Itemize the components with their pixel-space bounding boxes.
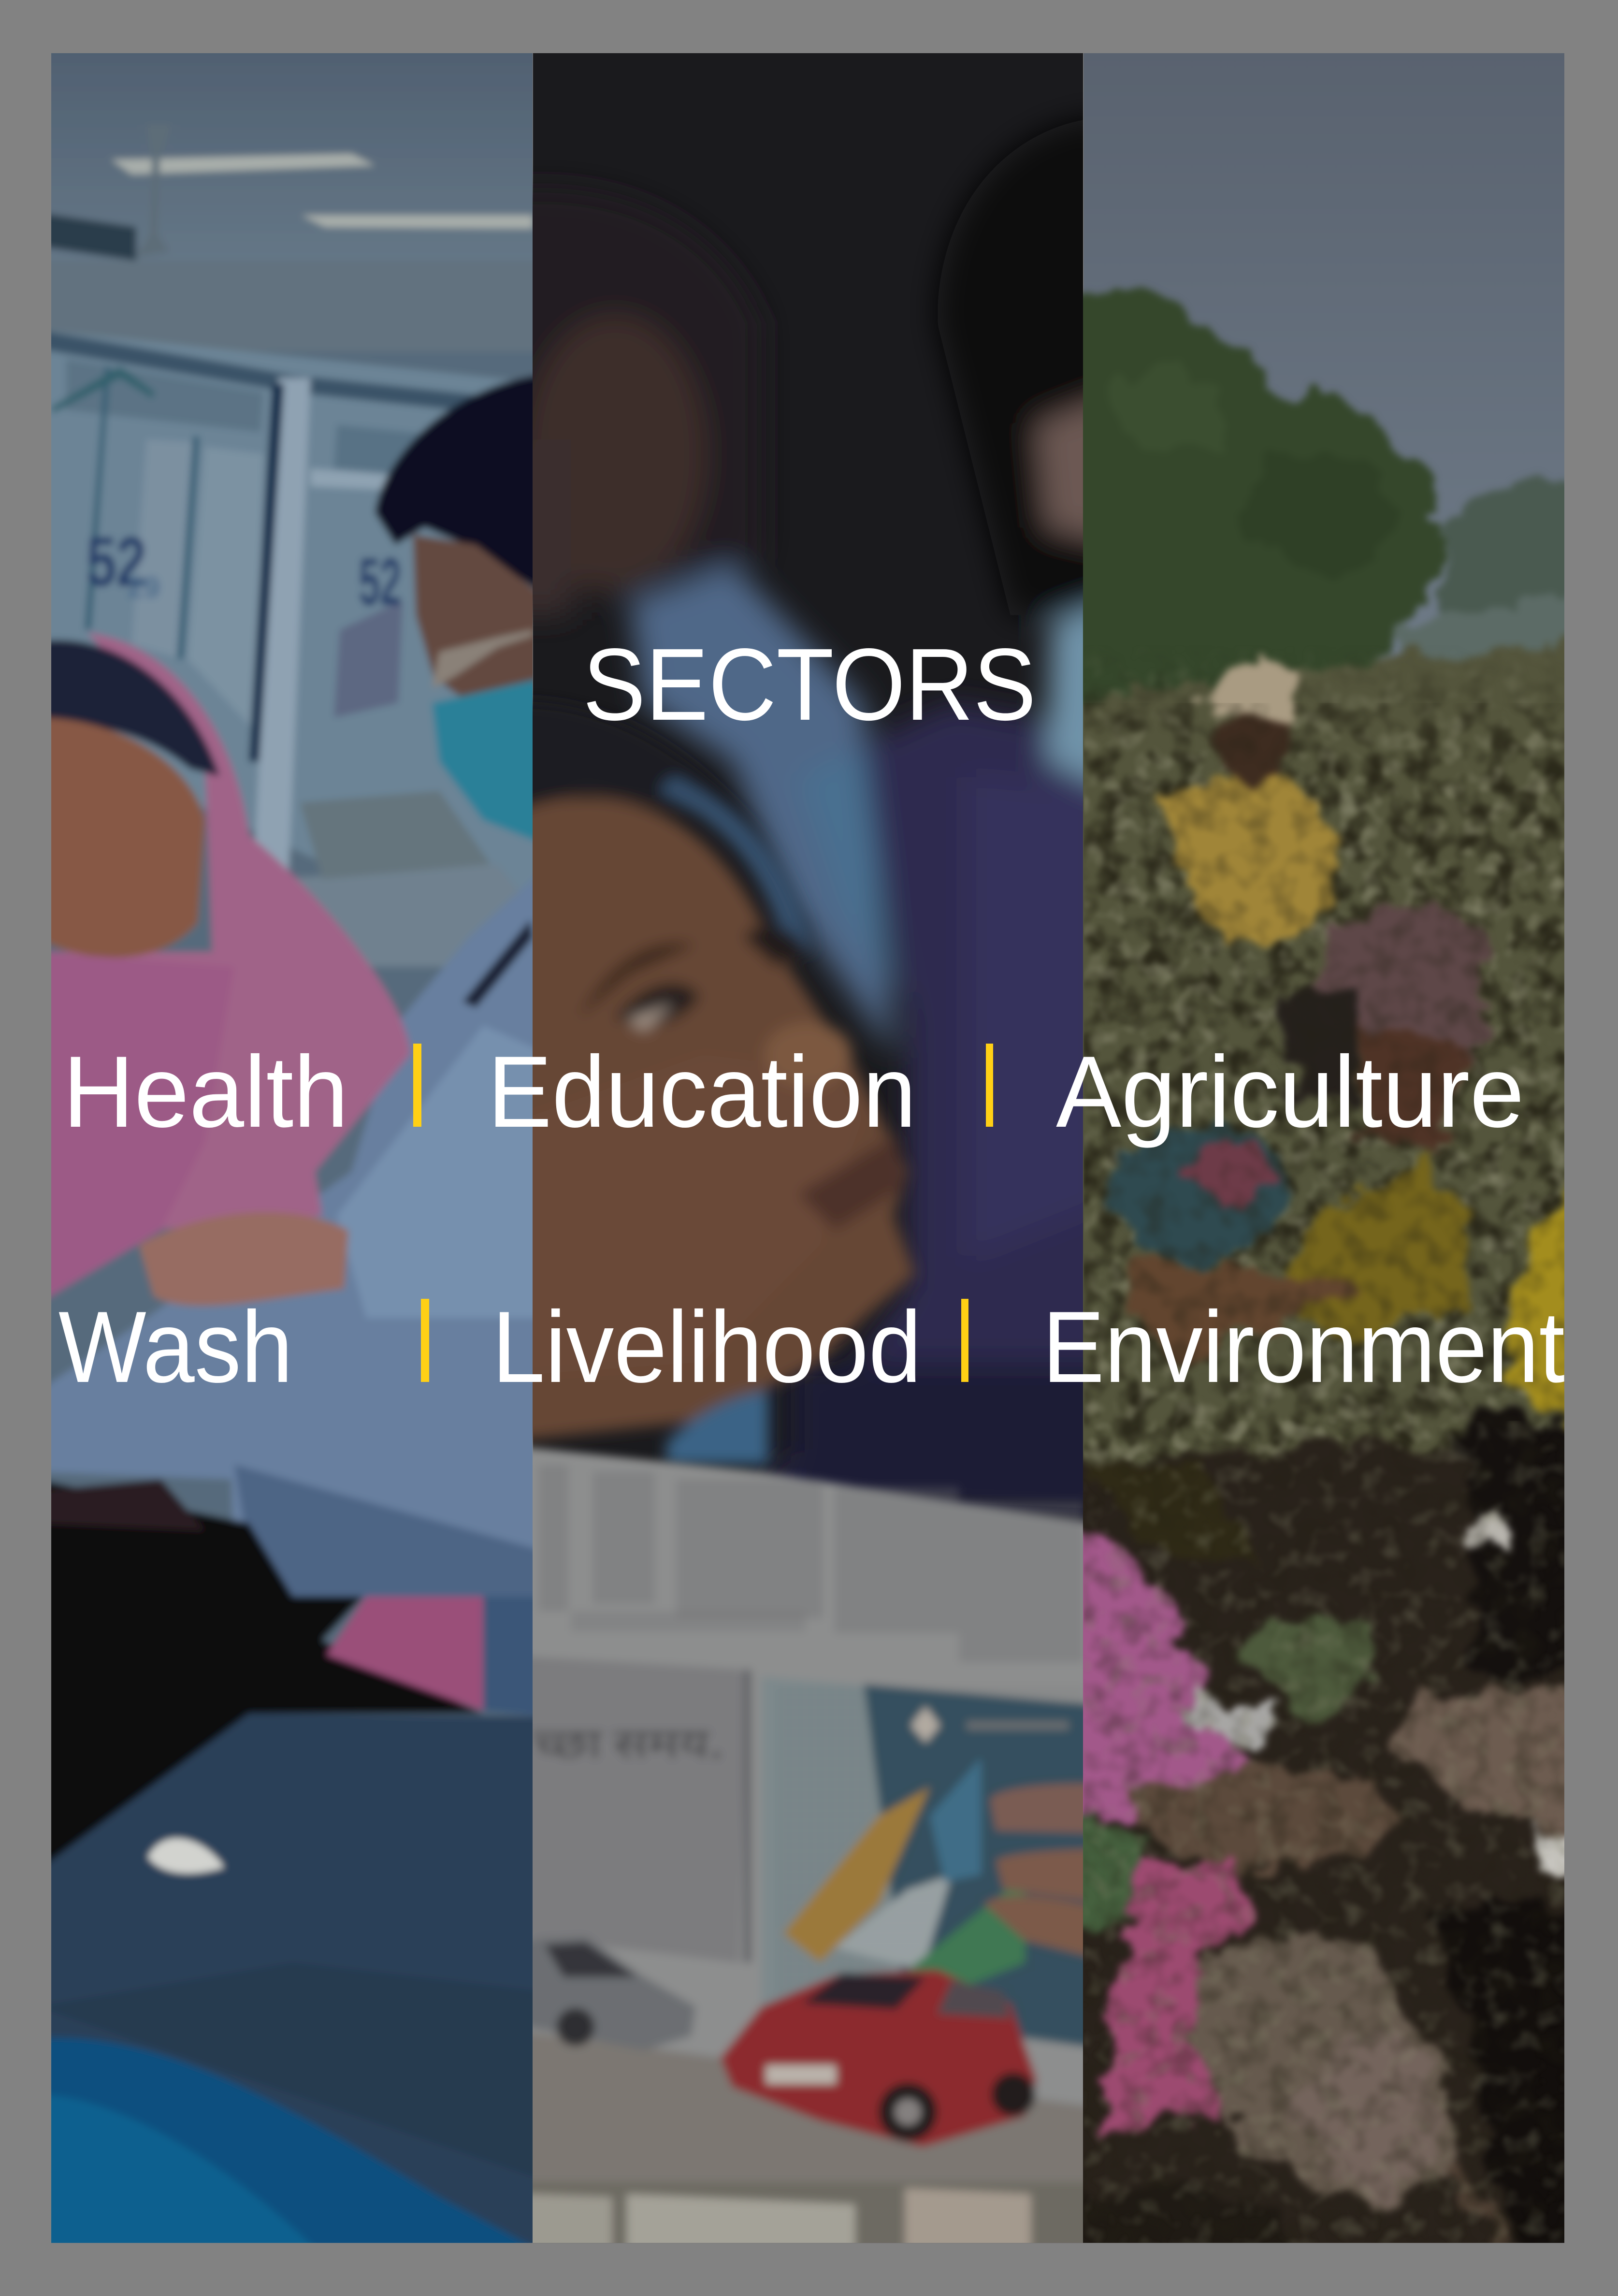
bottom shadow [1055, 2182, 1318, 2270]
window panes [66, 359, 263, 432]
woman face [37, 718, 205, 958]
large leaf [1199, 1934, 1451, 2211]
fingers [990, 1784, 1113, 1834]
red car [721, 1970, 1037, 2147]
yellow top [1288, 1157, 1472, 1340]
brown leaf centre [1127, 1767, 1406, 1878]
man face [1221, 700, 1291, 788]
label: Health: Health [63, 1035, 348, 1148]
foliage speckle overlay light [1083, 1421, 1565, 2244]
dark window post [249, 384, 284, 762]
cotton ball [148, 1838, 224, 1873]
panel: health photo: 52 [359, 544, 401, 619]
panel: health photo: 29 [128, 571, 160, 604]
air conditioner vent [37, 212, 136, 261]
eyebrow [578, 943, 695, 1018]
stem [1438, 2153, 1514, 2242]
pink lower cloth [1098, 1860, 1259, 2153]
man turban [1208, 662, 1298, 721]
label: Environment: Environment [1042, 1290, 1565, 1404]
foliage speckle overlay dark [1083, 703, 1565, 2244]
dark lap [37, 1479, 483, 1872]
ceiling fan [135, 125, 172, 258]
ceiling light two [302, 215, 533, 229]
woman shawl [37, 952, 234, 1304]
neck shirt [666, 1391, 769, 1465]
girl face [498, 797, 915, 1443]
grey car [498, 1936, 695, 2050]
advert gradient [762, 1677, 1113, 2050]
label: Education: Education [488, 1035, 916, 1148]
girl hair [498, 702, 813, 937]
panel: agriculture photo [1055, 53, 1596, 2270]
poster [334, 600, 403, 718]
panel: education photo [498, 53, 1113, 2255]
newspaper [498, 1444, 1113, 2255]
man shirt [1164, 776, 1340, 945]
hands [139, 1212, 348, 1306]
wall [37, 261, 549, 351]
green side leaf [1055, 1794, 1157, 1933]
separator: Wash and Livelihood [421, 1299, 429, 1382]
woman scarf [38, 633, 410, 1289]
flag pattern orange [783, 1787, 930, 1962]
child shirt [630, 564, 893, 1055]
label: Livelihood: Livelihood [492, 1290, 922, 1404]
separator: Education and Agriculture [986, 1044, 993, 1127]
ward number text: 52 [87, 522, 146, 601]
far right yellow [1501, 1150, 1596, 1443]
doctor mask [432, 677, 549, 846]
flag pattern green [820, 1875, 1025, 2021]
footer clippings [498, 2193, 612, 2255]
panel: health photo [37, 38, 549, 2258]
doctor coat [38, 864, 549, 1604]
sky [1083, 53, 1565, 668]
collar [1047, 600, 1113, 791]
green leaf [1242, 1613, 1384, 1718]
navy sweater [762, 703, 1113, 1494]
lower foliage dark [1055, 1443, 1596, 2270]
woman face [1355, 1011, 1464, 1157]
nose highlight [765, 1022, 852, 1087]
flag pattern white [835, 1875, 952, 1970]
doctor face [413, 535, 549, 703]
dark speckle [1083, 644, 1565, 1523]
label: Wash: Wash [58, 1290, 293, 1404]
window wall [37, 330, 549, 915]
eye [615, 984, 700, 1025]
ceiling light one [111, 154, 375, 174]
shrub field base [1055, 644, 1596, 1553]
trees [1055, 288, 1443, 718]
doctor hair [375, 374, 549, 597]
advert mesh [776, 1684, 1083, 2021]
article columns [539, 1465, 1083, 1662]
woman turban [1308, 903, 1494, 1055]
label: Agriculture: Agriculture [1056, 1035, 1524, 1148]
bright blue sheet [37, 2038, 549, 2255]
title: SECTORS: SECTORS [583, 627, 1036, 741]
light speckle [1083, 644, 1565, 1523]
headline: च्छा समय. [533, 1711, 723, 1770]
bench [37, 1714, 549, 2255]
woman hair [37, 640, 219, 776]
separator: Livelihood and Environment [961, 1299, 968, 1382]
right leaf [1384, 1691, 1596, 1846]
white cotton [1186, 1684, 1274, 1750]
pink sleeve [1055, 1516, 1259, 1816]
sill [278, 864, 533, 967]
separator: Health and Education [413, 1044, 421, 1127]
shrub speckle [1083, 644, 1565, 1523]
left head scarf [1116, 1123, 1286, 1264]
arm [1127, 1260, 1362, 1362]
ceiling [51, 53, 533, 260]
road [498, 2029, 1113, 2255]
pink cloth [327, 1597, 483, 1711]
white window frame [252, 378, 310, 908]
lips [798, 1135, 905, 1230]
window frame top [37, 330, 483, 413]
blurred children [498, 117, 1113, 1523]
advert logo [911, 1706, 940, 1743]
